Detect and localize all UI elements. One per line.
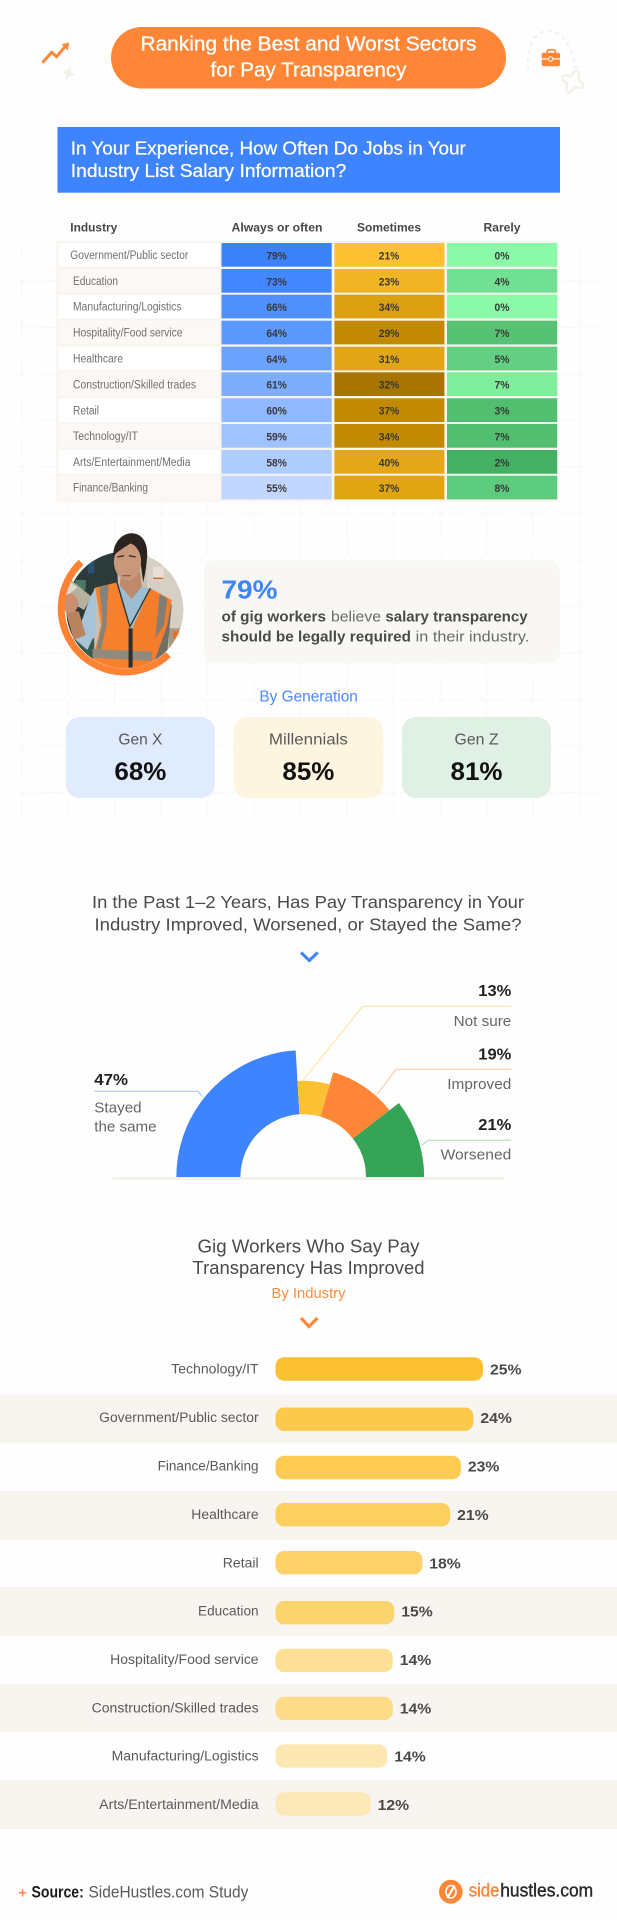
callout: 47% stayed the same: Stayed (94, 1099, 142, 1116)
section heading: salary information: In Your Experience, How Often Do Jobs in Your (71, 138, 466, 158)
heading: gig workers who say improved: Transparency Has Improved (192, 1257, 424, 1278)
bar values: 25% (490, 1362, 522, 1378)
source footer: SideHustles.com Study (88, 1883, 249, 1901)
logo: sidehustles.com: side (469, 1880, 500, 1900)
bar labels: Government/Public sector (99, 1410, 259, 1425)
callout: 19% improved: 19% (478, 1046, 511, 1063)
column: rarely: 7% (494, 380, 510, 392)
bar labels: Arts/Entertainment/Media (99, 1797, 259, 1812)
callout: 47% stayed the same (94, 1072, 203, 1135)
segment: improved (320, 1072, 389, 1139)
bar values: 14% (400, 1701, 431, 1717)
section heading: salary information: Industry List Salary Information? (71, 161, 346, 181)
column: always or often: 73% (266, 276, 287, 288)
card: Millennials: Millennials (269, 731, 348, 748)
column: sometimes: 29% (379, 328, 399, 340)
bar labels: Manufacturing/Logistics (112, 1748, 259, 1764)
column: always or often: 64% (266, 328, 287, 340)
row labels: Government/Public sector (70, 250, 188, 262)
table header: Rarely (484, 220, 521, 234)
heading: gig workers who say improved (192, 1235, 424, 1302)
column: sometimes: 32% (379, 380, 399, 392)
card: Millennials: 85% (282, 758, 334, 786)
bar labels: Technology/IT (171, 1362, 259, 1376)
bar values: 14% (400, 1653, 431, 1669)
row labels: Construction/Skilled trades (73, 379, 196, 391)
column: rarely: 4% (494, 276, 510, 288)
table header: Always or often (232, 220, 322, 234)
table header: Sometimes (357, 220, 421, 234)
card: Millennials (234, 717, 383, 798)
column: rarely: 0% (494, 302, 510, 314)
segment: stayed the same (176, 1050, 299, 1177)
icon: orange chevron (301, 1318, 318, 1326)
section heading: salary information (58, 127, 560, 193)
card: Gen Z: 81% (450, 758, 502, 786)
orange ring around photo (61, 562, 168, 672)
table header: Industry (70, 220, 118, 234)
bar labels: Construction/Skilled trades (92, 1700, 259, 1715)
bar values: 23% (468, 1460, 500, 1476)
callout: 47% stayed the same: 47% (94, 1072, 128, 1089)
column: always or often: 64% (266, 354, 287, 366)
card: Gen X (66, 717, 215, 798)
column: rarely: 0% (494, 250, 510, 262)
column: sometimes (334, 243, 444, 499)
column: always or often: 59% (266, 431, 287, 443)
row labels: Arts/Entertainment/Media (73, 457, 191, 469)
callout: 79% of gig workers: in their industry. (416, 629, 529, 645)
bar labels: Education (198, 1604, 259, 1618)
bar labels: Hospitality/Food service (110, 1652, 259, 1667)
heading: pay transparency change: In the Past 1–2 Years, Has Pay Transparency in Your (92, 892, 524, 912)
callout: 21% worsened: 21% (478, 1117, 511, 1134)
callout: 47% stayed the same: the same (94, 1118, 157, 1135)
column: always or often: 55% (266, 483, 287, 495)
callout: 19% improved (377, 1046, 511, 1095)
chart: semi-donut (113, 1050, 504, 1180)
callout: 13% not sure: 13% (478, 983, 511, 1000)
callout: 79% of gig workers: salary transparency (385, 610, 528, 626)
card: Gen X: 68% (114, 758, 166, 786)
heading: pay transparency change: Industry Improved, Worsened, or Stayed the Same? (94, 915, 522, 935)
column: rarely (447, 243, 557, 499)
callout: 19% improved: Improved (447, 1076, 511, 1093)
callout: 21% worsened (421, 1117, 511, 1163)
bar values: 21% (457, 1508, 489, 1524)
column: always or often: 66% (266, 302, 287, 314)
title pill: for Pay Transparency (210, 60, 406, 82)
source footer: Source: (32, 1883, 84, 1901)
card: Gen Z (402, 717, 551, 798)
card: Gen X: Gen X (118, 731, 163, 748)
heading: gig workers who say improved: Gig Workers Who Say Pay (198, 1235, 420, 1256)
bar labels: Retail (223, 1556, 259, 1570)
column: sometimes: 34% (379, 302, 399, 314)
column: always or often (222, 243, 332, 499)
source footer: + (18, 1884, 27, 1900)
row labels: Education (73, 276, 118, 288)
table: salary listing frequency by industry (56, 220, 559, 502)
row labels: Finance/Banking (73, 483, 148, 495)
heading: pay transparency change (92, 892, 524, 935)
callout: 13% not sure: Not sure (454, 1013, 511, 1030)
row labels: Retail (73, 405, 99, 417)
bar values: 18% (429, 1556, 461, 1572)
card: Gen Z: Gen Z (454, 731, 498, 748)
column: sometimes: 21% (379, 250, 399, 262)
callout: 79% of gig workers: believe (331, 610, 381, 626)
title pill: Ranking the Best and Worst Sectors (140, 34, 476, 56)
column: rarely: 3% (494, 406, 510, 418)
icon: gig worker photo illustration (60, 533, 189, 672)
column: rarely: 2% (494, 457, 510, 469)
column: sometimes: 34% (379, 431, 399, 443)
column: always or often: 58% (266, 457, 287, 469)
column: rarely: 7% (494, 328, 510, 340)
source footer (18, 1883, 249, 1901)
icon: briefcase with dashed arc and star outline (528, 31, 588, 97)
segment: not sure (297, 1081, 330, 1117)
column: sometimes: 37% (379, 483, 399, 495)
bar values: 15% (401, 1604, 433, 1620)
column: always or often: 60% (266, 406, 287, 418)
bar labels: Healthcare (191, 1507, 259, 1522)
callout: 21% worsened: Worsened (441, 1146, 511, 1163)
column: sometimes: 23% (379, 276, 399, 288)
column: rarely: 7% (494, 431, 510, 443)
column: sometimes: 31% (379, 354, 399, 366)
callout: 13% not sure (303, 983, 511, 1081)
bars (276, 1357, 483, 1816)
subheading: by generation: By Generation (259, 689, 358, 706)
logo: sidehustles.com (439, 1880, 593, 1904)
segment: worsened (353, 1103, 424, 1177)
callout: 79% of gig workers: of gig workers (222, 610, 326, 626)
bar labels: Finance/Banking (158, 1458, 259, 1474)
callout: 79% of gig workers (204, 561, 560, 663)
row labels: Healthcare (73, 354, 123, 366)
icon: trending arrow and star (43, 42, 77, 83)
bar values: 12% (378, 1798, 409, 1814)
bar values (378, 1362, 522, 1814)
logo: sidehustles.com: hustles.com (500, 1880, 593, 1900)
column: always or often: 61% (266, 380, 287, 392)
bar values: 24% (480, 1411, 512, 1427)
column: sometimes: 37% (379, 406, 399, 418)
row labels: Manufacturing/Logistics (73, 302, 182, 314)
heading: gig workers who say improved: By Industry (272, 1285, 346, 1302)
bar labels (92, 1362, 259, 1812)
column: always or often: 79% (266, 250, 287, 262)
icon: blue chevron (301, 952, 318, 960)
column: rarely: 5% (494, 354, 510, 366)
column: sometimes: 40% (379, 457, 399, 469)
title pill (111, 27, 506, 88)
row labels: Technology/IT (73, 431, 138, 443)
callout: 79% of gig workers: 79% (222, 574, 278, 604)
bar values: 14% (394, 1750, 426, 1766)
column: rarely: 8% (494, 483, 510, 495)
callout: 79% of gig workers: should be legally required (222, 629, 411, 645)
row labels: Hospitality/Food service (73, 328, 182, 340)
table header (70, 220, 521, 234)
bar chart: improved by industry (0, 1357, 617, 1829)
row labels (59, 243, 219, 499)
